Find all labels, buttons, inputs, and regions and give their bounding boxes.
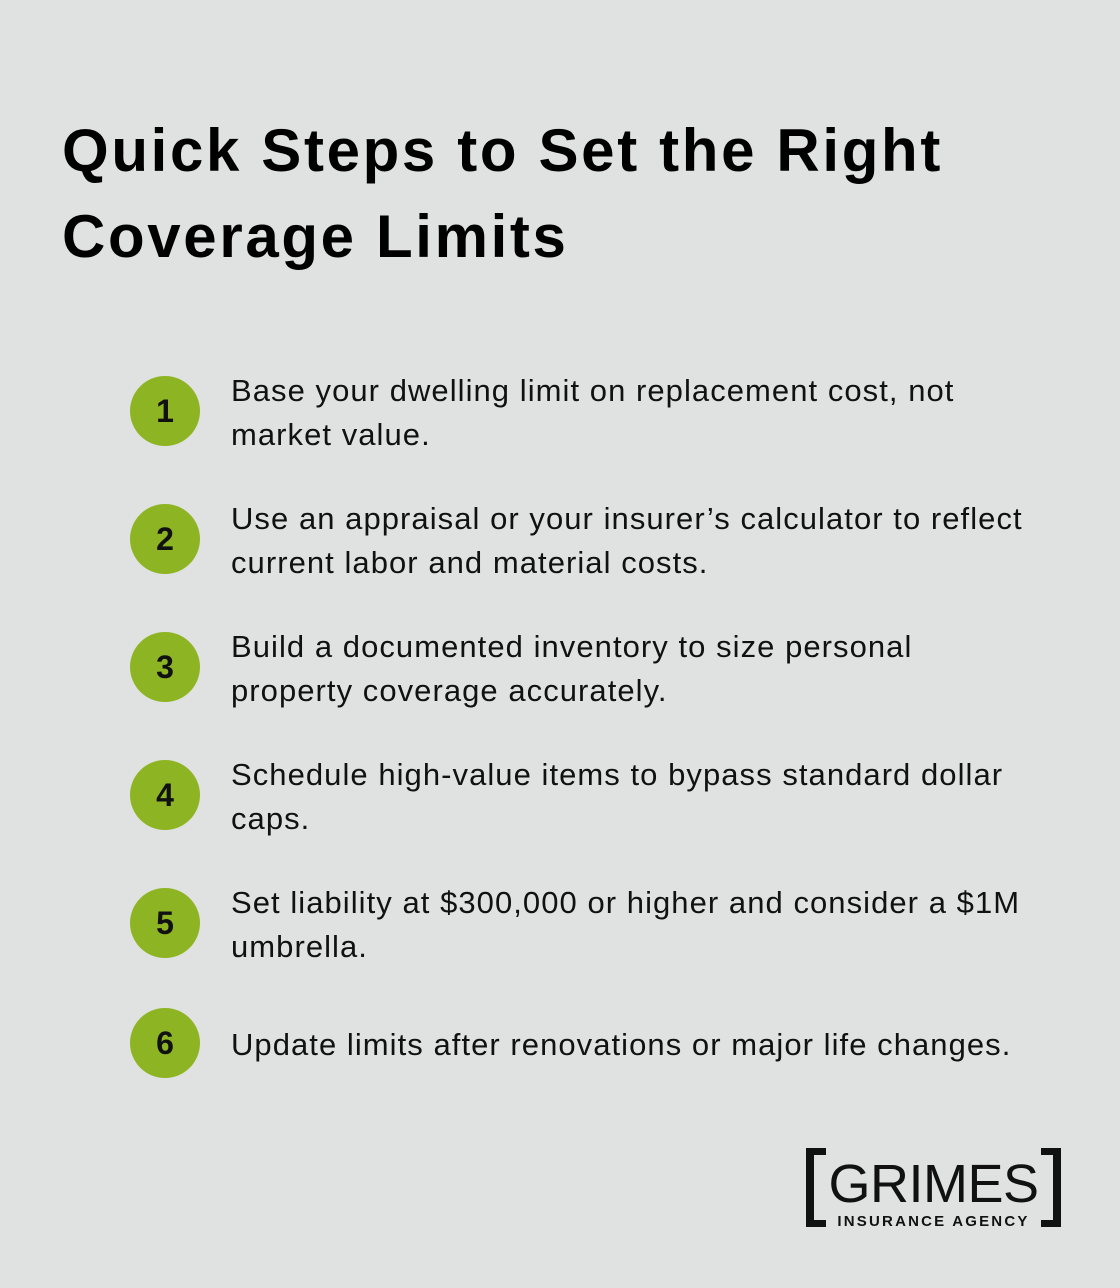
title (62, 117, 943, 270)
logo: GRIMES (828, 1154, 1039, 1214)
step 3 (130, 629, 912, 708)
step 1: market value. (231, 417, 431, 452)
step 4: Schedule high-value items to bypass standard dollar (231, 757, 1003, 792)
step 5: umbrella. (231, 929, 368, 964)
step 6: Update limits after renovations or major life changes. (231, 1027, 1011, 1062)
step 1: Base your dwelling limit on replacement cost, not (231, 373, 954, 408)
step 4: 4 (156, 777, 174, 813)
title: Coverage Limits (62, 203, 569, 270)
step 1: 1 (156, 393, 174, 429)
step 1 (130, 373, 954, 452)
step 3: Build a documented inventory to size personal (231, 629, 912, 664)
step 5: 5 (156, 905, 174, 941)
step 5: Set liability at $300,000 or higher and consider a $1M (231, 885, 1020, 920)
step 2: current labor and material costs. (231, 545, 708, 580)
step 4 (130, 757, 1003, 836)
step 6: 6 (156, 1025, 174, 1061)
step 4: caps. (231, 801, 310, 836)
step 2 (130, 501, 1023, 580)
logo: INSURANCE AGENCY (837, 1213, 1030, 1230)
step 5 (130, 885, 1020, 964)
step 3: property coverage accurately. (231, 673, 668, 708)
title: Quick Steps to Set the Right (62, 117, 943, 184)
step 6 (130, 1008, 1011, 1078)
step 3: 3 (156, 649, 174, 685)
logo (806, 1148, 1061, 1230)
step 2: 2 (156, 521, 174, 557)
step 2: Use an appraisal or your insurer’s calculator to reflect (231, 501, 1023, 536)
